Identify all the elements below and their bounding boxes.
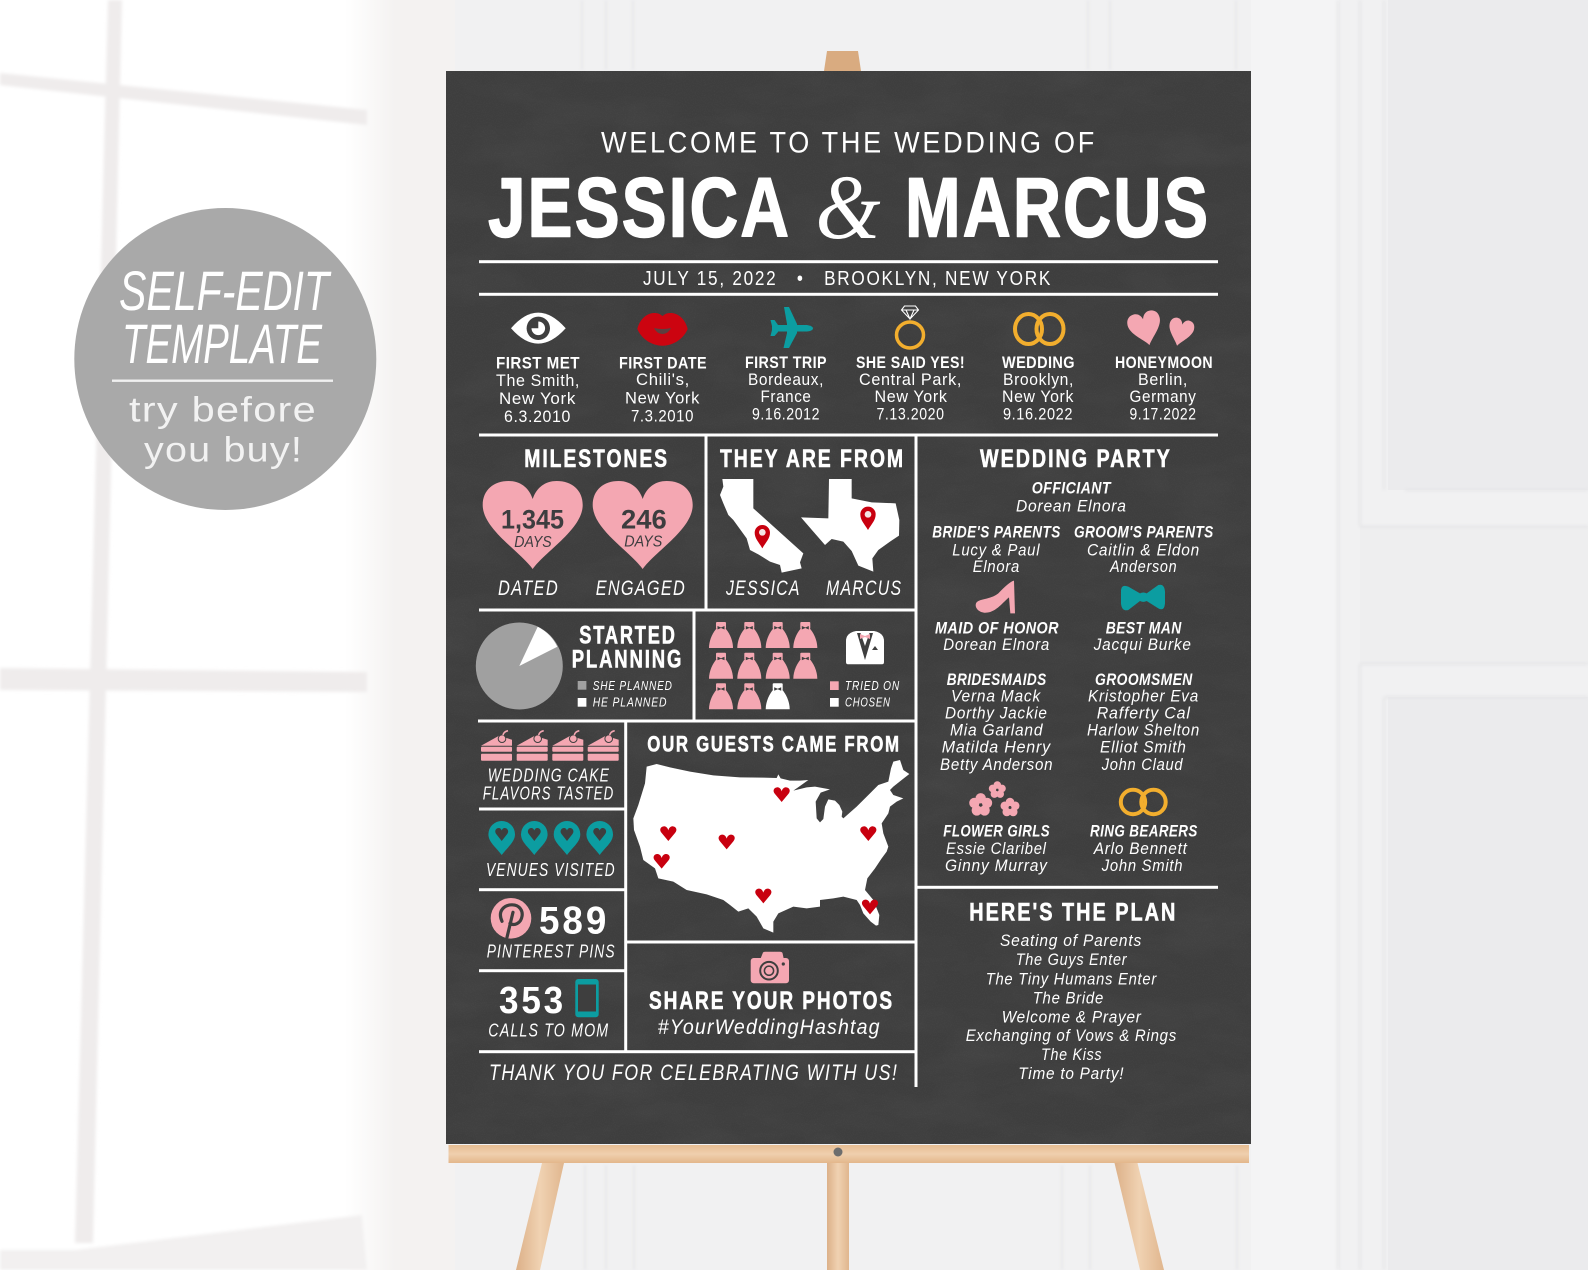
plan list: The Guys Enter <box>1016 950 1128 969</box>
bridesmaids: Verna Mack <box>951 687 1042 706</box>
first date text: New York <box>625 388 700 408</box>
bridesmaids: Betty Anderson <box>940 755 1053 774</box>
stat: pinterest pins <box>487 898 616 961</box>
first met text: New York <box>499 389 576 408</box>
badge tagline: try before <box>129 391 317 430</box>
title: couple names: & <box>816 156 881 258</box>
icon: camera <box>751 952 789 983</box>
maid of honor: Dorean Elnora <box>943 635 1050 654</box>
heading: the plan: HERE'S THE PLAN <box>969 899 1177 927</box>
timeline: wedding <box>1002 314 1075 424</box>
flower girls <box>943 822 1050 875</box>
heading: milestones: MILESTONES <box>524 445 669 473</box>
pie legend <box>578 678 673 710</box>
icon: diamond ring <box>896 306 924 348</box>
title: couple names: JESSICA <box>488 160 791 254</box>
icon: phone <box>575 979 599 1017</box>
she said yes text: 7.13.2020 <box>876 404 944 424</box>
icon: eye <box>511 313 566 344</box>
flower girls: FLOWER GIRLS <box>943 822 1050 841</box>
icon: bow tie <box>1121 585 1165 610</box>
groom's parents <box>1074 522 1214 576</box>
dress legend: CHOSEN <box>845 695 891 710</box>
plan list <box>966 931 1177 1083</box>
icon: high heel <box>976 581 1015 613</box>
she said yes text <box>856 353 965 424</box>
bridesmaids: Mia Garland <box>950 721 1043 740</box>
heading: started planning: PLANNING <box>572 646 683 674</box>
icon row: cakes <box>481 731 619 761</box>
plan list: The Tiny Humans Enter <box>986 969 1157 988</box>
groom's parents: Caitlin & Eldon <box>1087 540 1200 559</box>
cake caption: FLAVORS TASTED <box>483 783 614 803</box>
bride's parents: Lucy & Paul <box>952 540 1041 559</box>
flower girls: Essie Claribel <box>946 839 1047 858</box>
pie legend: HE PLANNED <box>593 695 667 710</box>
dress legend: TRIED ON <box>845 678 900 693</box>
groomsmen: Kristopher Eva <box>1088 687 1199 706</box>
heading: guests: OUR GUESTS CAME FROM <box>647 732 901 757</box>
heading: they are from: THEY ARE FROM <box>720 445 905 473</box>
badge: self-edit template <box>74 208 376 510</box>
ring bearers: John Smith <box>1101 856 1183 875</box>
groomsmen: GROOMSMEN <box>1095 670 1193 689</box>
she said yes text: New York <box>874 387 948 406</box>
state captions <box>725 577 902 600</box>
panel: share your photos <box>649 952 894 1039</box>
thank you line: THANK YOU FOR CELEBRATING WITH US! <box>489 1060 898 1085</box>
officiant: OFFICIANT <box>1032 478 1112 497</box>
groomsmen: Harlow Shelton <box>1087 721 1200 740</box>
title: couple names <box>488 156 1210 258</box>
bride's parents <box>932 522 1061 576</box>
icon: airplane <box>770 307 813 348</box>
badge headline: SELF-EDIT <box>119 259 332 322</box>
wedding text: 9.16.2022 <box>1003 404 1073 424</box>
she said yes text: SHE SAID YES! <box>856 353 965 372</box>
icon row: dresses <box>709 622 817 709</box>
groom's parents: GROOM'S PARENTS <box>1074 522 1214 541</box>
bridesmaids: BRIDESMAIDS <box>947 670 1047 689</box>
timeline: she said yes <box>856 306 965 424</box>
hashtag: #YourWeddingHashtag <box>658 1016 881 1039</box>
groomsmen: Elliot Smith <box>1100 738 1187 757</box>
panel: they are from <box>720 445 905 600</box>
stat: wedding cake flavors <box>481 731 619 803</box>
milestone captions: DATED <box>498 577 559 600</box>
icon: ring bearers rings <box>1121 790 1166 814</box>
date and location: JULY 15, 2022 • BROOKLYN, NEW YORK <box>643 268 1052 290</box>
plan list: Exchanging of Vows & Rings <box>966 1026 1177 1045</box>
stat: calls to mom <box>488 979 609 1041</box>
cake caption <box>483 766 614 803</box>
flower girls: Ginny Murray <box>945 856 1048 875</box>
plan list: The Kiss <box>1041 1045 1102 1064</box>
map hearts <box>654 787 878 914</box>
honeymoon text: HONEYMOON <box>1115 353 1213 372</box>
first met text: 6.3.2010 <box>504 407 571 426</box>
bridesmaids: Matilda Henry <box>942 738 1052 757</box>
plan list: Time to Party! <box>1018 1064 1124 1083</box>
icon: pinterest <box>491 898 531 939</box>
plan list: The Bride <box>1033 988 1104 1007</box>
groomsmen: John Claud <box>1101 755 1183 774</box>
heart: days engaged: 246 <box>621 504 667 534</box>
badge headline: TEMPLATE <box>122 312 322 375</box>
milestone captions: ENGAGED <box>596 577 686 600</box>
she said yes text: Central Park, <box>859 370 962 389</box>
easel <box>448 51 1249 1270</box>
dress legend <box>830 678 900 710</box>
state captions: MARCUS <box>826 577 902 600</box>
plan list: Welcome & Prayer <box>1002 1007 1142 1026</box>
first date text: Chili's, <box>636 370 690 389</box>
wedding text: Brooklyn, <box>1003 370 1074 389</box>
best man <box>1093 618 1192 654</box>
title: welcome line: WELCOME TO THE WEDDING OF <box>601 126 1097 160</box>
map: texas <box>801 479 899 572</box>
first trip text: FIRST TRIP <box>745 353 827 372</box>
badge tagline: you buy! <box>144 431 303 470</box>
honeymoon text: Germany <box>1130 387 1196 406</box>
title: couple names: MARCUS <box>905 160 1210 254</box>
best man: BEST MAN <box>1106 618 1182 637</box>
heart: days dated: DAYS <box>514 534 552 551</box>
best man: Jacqui Burke <box>1093 635 1192 654</box>
venues caption: VENUES VISITED <box>486 860 616 880</box>
honeymoon text: 9.17.2022 <box>1130 404 1196 424</box>
groom's parents: Anderson <box>1109 557 1177 576</box>
wedding text: WEDDING <box>1002 353 1075 372</box>
panel: here's the plan <box>966 899 1177 1083</box>
map: united states <box>633 760 909 933</box>
ring bearers <box>1090 822 1198 875</box>
first date text: 7.3.2010 <box>631 406 694 426</box>
timeline: first trip <box>745 307 827 424</box>
honeymoon text: Berlin, <box>1138 370 1188 389</box>
first met text: The Smith, <box>496 371 580 390</box>
bridesmaids: Dorthy Jackie <box>945 704 1048 723</box>
heart: days engaged: DAYS <box>624 534 663 551</box>
panel: milestones <box>483 445 693 600</box>
bride's parents: Elnora <box>973 557 1020 576</box>
icon row: venue pins <box>488 821 613 855</box>
ring bearers: Arlo Bennett <box>1093 839 1188 858</box>
heart: days dated: 1,345 <box>501 504 564 534</box>
badge headline <box>119 259 332 375</box>
stat: venues visited <box>486 821 616 880</box>
icon: two hearts <box>1125 309 1196 349</box>
icon: lips <box>637 313 688 346</box>
first date text: FIRST DATE <box>619 353 707 372</box>
number: 353: 353 <box>499 980 566 1022</box>
cake caption: WEDDING CAKE <box>488 766 610 786</box>
first trip text <box>745 353 827 424</box>
plan list: Seating of Parents <box>1000 931 1142 950</box>
heading: started planning <box>572 621 683 674</box>
first date text <box>619 353 707 426</box>
heading: wedding party: WEDDING PARTY <box>980 445 1172 473</box>
pie chart <box>476 622 563 710</box>
icon: wedding rings <box>1015 314 1064 344</box>
heading: share your photos: SHARE YOUR PHOTOS <box>649 987 894 1015</box>
icon: flowers <box>969 781 1020 816</box>
first trip text: Bordeaux, <box>748 370 824 389</box>
timeline: honeymoon <box>1115 309 1213 424</box>
panel: wedding party <box>932 445 1214 875</box>
first met text: FIRST MET <box>496 353 580 372</box>
honeymoon text <box>1115 353 1213 424</box>
map: california <box>720 479 803 573</box>
first trip text: France <box>760 387 812 406</box>
wedding text <box>1002 353 1075 424</box>
panel: started planning <box>476 621 683 710</box>
bridesmaids <box>940 670 1053 774</box>
groomsmen: Rafferty Cal <box>1097 704 1191 723</box>
timeline: first met <box>496 313 580 426</box>
panel: dresses tried on <box>709 622 900 710</box>
icon: tuxedo <box>846 631 884 664</box>
officiant <box>1016 478 1127 516</box>
chalkboard sign <box>446 71 1251 1144</box>
groomsmen <box>1087 670 1200 774</box>
number: 589: 589 <box>539 899 609 942</box>
timeline: first date <box>619 313 707 426</box>
calls caption: CALLS TO MOM <box>488 1021 609 1041</box>
badge tagline <box>129 391 317 470</box>
first trip text: 9.16.2012 <box>752 404 820 424</box>
first met text <box>496 353 580 426</box>
panel: our guests came from <box>633 732 909 933</box>
pinterest caption: PINTEREST PINS <box>487 941 616 961</box>
bride's parents: BRIDE'S PARENTS <box>932 522 1061 541</box>
pie legend: SHE PLANNED <box>593 678 673 693</box>
wedding text: New York <box>1002 387 1074 406</box>
heading: started planning: STARTED <box>579 621 677 649</box>
ring bearers: RING BEARERS <box>1090 822 1198 841</box>
heart: days dated <box>483 481 583 569</box>
officiant: Dorean Elnora <box>1016 497 1127 516</box>
maid of honor <box>935 618 1059 654</box>
heart: days engaged <box>593 481 693 569</box>
maid of honor: MAID OF HONOR <box>935 618 1059 637</box>
state captions: JESSICA <box>725 577 801 600</box>
milestone captions <box>498 577 686 600</box>
